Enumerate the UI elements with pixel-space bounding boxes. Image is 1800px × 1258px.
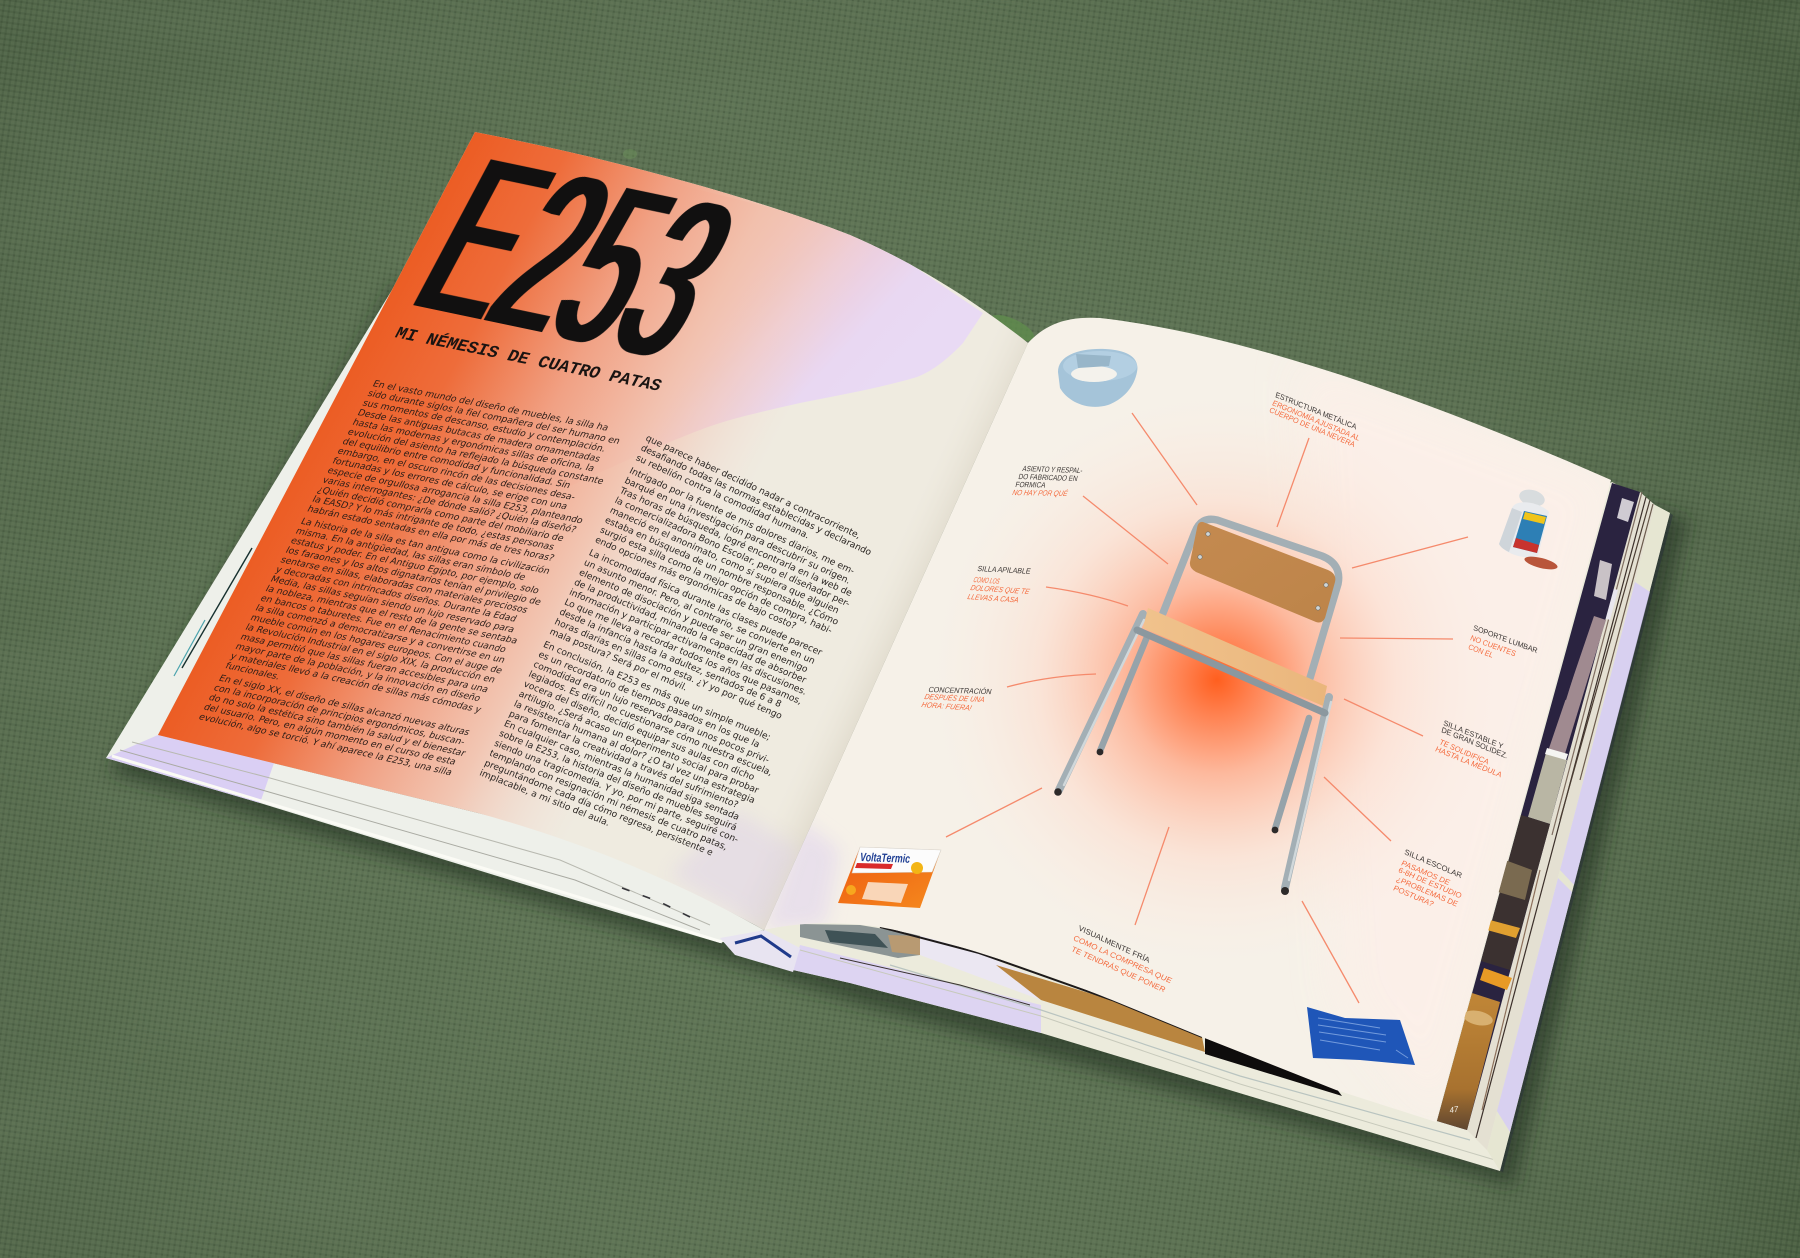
next page photo strip on the right edge <box>1437 483 1640 1130</box>
article text column 1: ¿Quién decidió comprarla como parte del mobiliario de <box>315 485 566 544</box>
article text column 2: horas diarias en sillas como esta. ¿Y yo por qué tengo <box>553 617 784 722</box>
article text column 1: embargo, en el oscuro rincón de las decisiones desa- <box>335 446 577 503</box>
subtitle: MI NÉMESIS DE CUATRO PATAS <box>391 323 666 396</box>
backrest panel <box>1190 522 1335 622</box>
front legs <box>1059 614 1329 888</box>
article text column 1: sentarse en sillas, elaboradas con materiales preciosos <box>278 555 530 616</box>
article text column 2: Lo que me lleva a recordar todos los años que pasamos, <box>562 598 803 707</box>
right page block: stacked pages and cover <box>764 482 1670 1171</box>
callout: silla apilable <box>966 564 1032 605</box>
article text column 2: un asunto menor. Pero, al contrario, se convierte en un <box>582 558 816 667</box>
icon: neck brace <box>1058 349 1137 407</box>
article text column 1: la EASD? Y lo más intrigante de todo, ¿estas personas <box>310 494 556 553</box>
article text column 2: siendo una tragicomedia. Y yo, por mi parte, seguiré con- <box>492 738 740 845</box>
wooden seat <box>1143 608 1327 706</box>
article text column 1: del usuario. Pero, en algún momento en el curso de esta <box>202 702 458 768</box>
article text column 1: funcionales. <box>223 661 282 682</box>
back cover edge in cream and lavender <box>1487 505 1673 1172</box>
callout: silla escolar <box>1392 847 1463 909</box>
callout: estructura metálica: ESTRUCTURA METÁLICA <box>1274 390 1358 432</box>
callout: soporte lumbar: CON ÉL <box>1468 642 1494 660</box>
article text column 2 <box>478 434 873 859</box>
article text column 1: estatus y poder. En el Antiguo Egipto, por ejemplo, solo <box>289 536 541 596</box>
article text column 2: templando con resignación mi némesis de cuatro patas, <box>487 748 729 853</box>
callout: silla escolar: PASAMOS DE <box>1400 858 1452 888</box>
article text column 1: evolución del asiento ha reflejado la búsqueda constante <box>346 427 606 487</box>
article text column 1: varias interrogantes: ¿De dónde salió? ¿Quién la diseñó? <box>320 475 578 535</box>
article text column 1: en bancos o taburetes. Fue en el Renacimiento cuando <box>258 593 508 655</box>
article text column 1: hasta las modernas y ergonómicas sillas de oficina, la <box>351 417 596 474</box>
article text column 1: habrán estado sentadas en ella por más de tres horas? <box>305 504 556 564</box>
article text column 2: comodidad era un lujo reservado para unos pocos privi- <box>532 660 771 766</box>
callout: concentración: CONCENTRACIÓN <box>928 685 993 696</box>
article text column 1: La historia de la silla es tan antigua como la civilización <box>299 516 552 577</box>
curled photo pages under right page <box>800 924 1342 1096</box>
fore-edge of stacked pages on the right <box>1467 492 1655 1150</box>
callout: estructura metálica: CUERPO DE UNA NEVERA <box>1268 405 1356 449</box>
article text column 1: masa permitió que las sillas fueran accesibles para una <box>238 632 490 695</box>
callout: silla apilable: SILLA APILABLE <box>976 564 1032 576</box>
article text column 1: la nobleza, mientras que el resto de la gente se sentaba <box>263 584 520 646</box>
article text column 1: Desde las antiguas butacas de madera ornamentadas <box>356 408 602 465</box>
article text column 2: para fomentar la creatividad a través del sufrimiento? <box>507 708 740 811</box>
article text column 2: endo opciones más ergonómicas de bajo costo? <box>593 535 798 632</box>
callout: silla escolar: SILLA ESCOLAR <box>1403 847 1463 880</box>
article text column 1: En el vasto mundo del diseño de muebles, la silla ha <box>371 379 610 434</box>
article text column 2: vocera del diseño, decidió equipar sus aulas con dicho <box>522 679 757 783</box>
right page: annotated chair <box>760 310 1620 1130</box>
article text column 2: artilugio. ¿Será acaso un experimento social para probar <box>517 690 760 796</box>
callout: silla estable: SILLA ESTABLE Y <box>1442 718 1504 751</box>
article text column 2: desafiando todas las normas establecidas y declarando <box>639 444 873 558</box>
left page block: stacked pages and cover <box>106 285 764 943</box>
page paper and gradient <box>140 120 1040 940</box>
title: E253: E253 <box>384 112 769 404</box>
callout: soporte lumbar: SOPORTE LUMBAR <box>1473 623 1539 655</box>
article text column 1: evolución, algo se torció. Y ahí aparece la E253, una silla <box>197 712 454 778</box>
callout: soporte lumbar: NO CUENTES <box>1470 633 1517 658</box>
callout: concentración: HORA: FUERA! <box>920 700 974 712</box>
article text column 1: especie de orgullosa arrogancia la silla E253, planteando <box>325 465 585 526</box>
article text column 1: fortunadas y los errores de cálculo, se erige con una <box>330 456 569 512</box>
callout: asiento y respaldo <box>1012 464 1084 498</box>
article text column 2: Intrigado por la fuente de mis dolores diarios, me em- <box>627 466 856 577</box>
callout: visualmente fría: COMO LA COMPRESA QUE <box>1072 933 1174 986</box>
rear legs <box>1100 637 1309 829</box>
seat rail <box>1137 630 1325 713</box>
article text column 2: es un recordatorio de tiempos pasados en los que la <box>536 650 761 750</box>
callout: silla escolar: 6-8H DE ESTUDIO <box>1397 865 1463 901</box>
callout: silla escolar: ¿PROBLEMAS DE <box>1395 874 1460 909</box>
screws <box>1198 532 1328 610</box>
chair <box>1054 519 1339 895</box>
callout: asiento y respaldo: DO FABRICADO EN <box>1018 472 1079 483</box>
article text column 2: La incomodidad física durante las clases puede parecer <box>587 548 824 658</box>
callout: silla apilable: DOLORES QUE TE <box>969 583 1032 596</box>
article text column 2: Tras horas de búsqueda, logré encontrarla en la web de <box>617 485 854 599</box>
callout: asiento y respaldo: NO HAY POR QUÉ <box>1012 488 1069 498</box>
pointer lines <box>946 413 1468 1003</box>
article text column 1: y decoradas con intrincados diseños. Durante la Edad <box>273 564 519 625</box>
article text column 2: de la productividad, minando la capacidad de absorber <box>572 578 808 686</box>
callout: visualmente fría: VISUALMENTE FRÍA <box>1077 923 1152 965</box>
article text column 2: su rebelión contra la comodidad humana. <box>634 453 811 541</box>
page paper with orange glow <box>760 310 1620 1130</box>
article text column 2: elemento de disociación y puede ser un gran enemigo <box>577 567 810 675</box>
callout: asiento y respaldo: ASIENTO Y RESPAL- <box>1022 464 1084 475</box>
article text column 1: del equilibrio entre comodidad y funcionalidad. Sin <box>340 436 573 491</box>
article text column 2: implacable, a mi sitio del aula. <box>478 769 611 829</box>
article text column 2: sobre la E253, la historia del diseño de muebles seguirá <box>497 729 738 833</box>
article text column 2: la comercializadora Bono Escolar, pero el diseñador per- <box>613 496 851 609</box>
article text column 2: legiados. Es difícil no cuestionarse cómo nuestra escuela, <box>527 669 774 778</box>
icon: VoltaTermic heat patch box <box>838 847 941 908</box>
callout: concentración <box>920 685 993 712</box>
callout: silla apilable: LLEVAS A CASA <box>966 592 1020 605</box>
callout: silla estable <box>1434 718 1509 780</box>
article text column 2: maneció en el anonimato, como si supiera que alguien <box>608 505 841 616</box>
article text column 2: preguntándome cada día cómo regresa, persistente e <box>483 758 715 859</box>
spine with blue ribbon <box>720 930 800 972</box>
book drop shadow <box>110 285 1688 1186</box>
left page: E253 article <box>140 112 1040 940</box>
feet <box>1054 749 1289 895</box>
callout: silla apilable: COMO LOS <box>972 575 1001 586</box>
article text column 2: surgió esta silla como la mejor opción de compra, habi- <box>598 525 834 636</box>
backrest frame <box>1163 519 1339 678</box>
article text column 1: y materiales llevó a la creación de sillas más cómodas y <box>228 651 484 715</box>
article text column 1: con la incorporación de principios ergonómicos, buscan- <box>212 683 467 748</box>
icon: pill bottle <box>1499 487 1559 572</box>
callout: estructura metálica: ERGONOMÍA AJUSTADA AL <box>1271 398 1361 443</box>
article text column 2: mala postura? Será por el móvil. <box>548 626 689 693</box>
article text column 1: sus momentos de descanso, estudio y contemplación. <box>361 398 608 455</box>
icon: blue cold pack <box>1307 1007 1415 1065</box>
article text column 1: mueble común en los hogares europeos. Con el auge de <box>248 613 505 676</box>
article text column 2: información y participar activamente en las discusiones. <box>567 587 809 698</box>
leg highlights <box>1064 620 1331 880</box>
article text column 2: estaba en búsqueda de un nombre responsable. ¿Cómo <box>603 515 841 628</box>
callout: silla escolar: POSTURA? <box>1392 883 1435 909</box>
article text column 1: do no solo la estética sino también la salud y el bienestar <box>207 692 468 759</box>
article text column 2: que parece haber decidido nadar a contracorriente, <box>644 434 862 541</box>
article text column 1: sido durante siglos la fiel compañera del ser humano en <box>366 388 622 447</box>
article text column 1: Media, las sillas seguían siendo un lujo reservado para <box>268 574 517 635</box>
callout: concentración: DESPUÉS DE UNA <box>923 692 986 704</box>
article text column 2: En cualquier caso, mientras la humanidad siga sentada <box>502 719 741 823</box>
callout: silla estable: TE SOLIDIFICA <box>1438 737 1490 767</box>
callout: silla estable: DE GRAN SOLIDEZ. <box>1440 725 1509 761</box>
article text column 1: mayor parte de la población, y la innovación en diseño <box>233 641 483 704</box>
callout: silla estable: HASTA LA MÉDULA <box>1434 744 1503 780</box>
article text column 2: la resistencia humana al dolor? ¿O tal vez una estrategia <box>512 699 756 806</box>
callout: asiento y respaldo: FORMICA <box>1015 480 1047 490</box>
article text column 1: la silla comenzó a democratizarse y a convertirse en un <box>253 603 507 666</box>
article text column 1 <box>197 379 622 778</box>
article text column 2: En conclusión, la E253 es más que un simple mueble; <box>541 639 772 743</box>
article text column 1: los faraones y los altos dignatarios tenían el privilegio de <box>284 545 543 608</box>
callout: visualmente fría: TE TENDRÁS QUE PONER <box>1070 944 1167 995</box>
article text column 2: desde la infancia hasta la adultez, sentados de 6 a 8 <box>557 608 783 710</box>
article text column 1: misma. En la antigüedad, las sillas eran símbolo de <box>294 526 528 583</box>
page number: 47 <box>1449 1104 1460 1115</box>
icon: VoltaTermic heat patch box: VoltaTermic <box>860 850 911 866</box>
callout: visualmente fría <box>1070 923 1174 995</box>
article text column 1: la Revolución Industrial en el siglo XIX, la producción en <box>243 622 497 685</box>
article text column 2: barqué en una investigación para descubrir su origen. <box>623 475 852 587</box>
article text column 1: En el siglo XX, el diseño de sillas alcanzó nuevas alturas <box>217 673 472 738</box>
